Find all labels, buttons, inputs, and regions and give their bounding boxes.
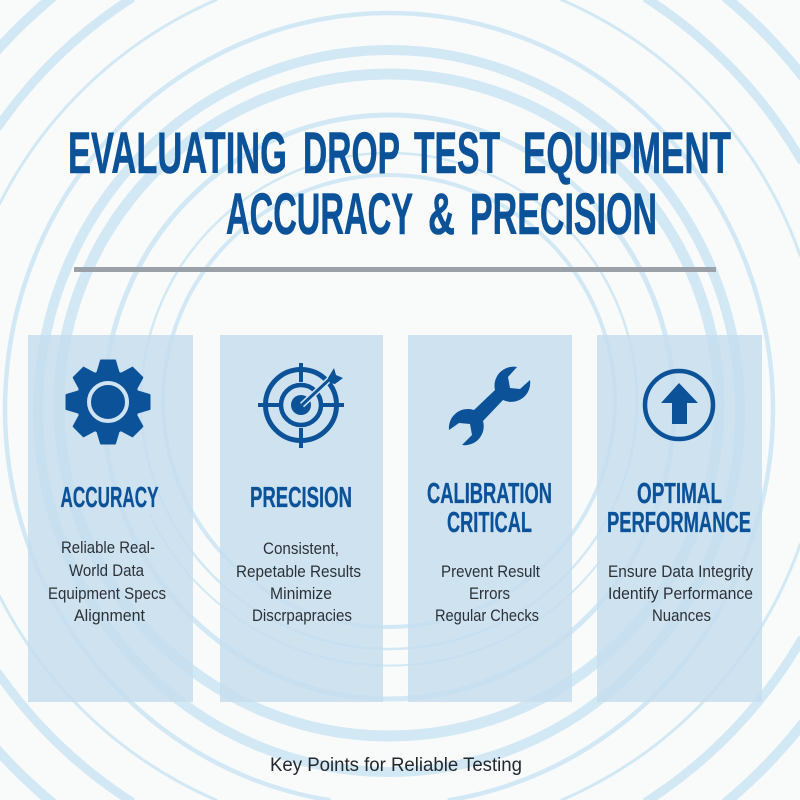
text: accuracy points: World Data (69, 561, 144, 580)
heading: optimal performance: OPTIMAL (637, 478, 722, 510)
title: ACCURACY (226, 182, 413, 247)
text: calibration points: Regular Checks (435, 606, 539, 625)
title: PRECISION (470, 182, 657, 247)
icon: up arrow in circle (645, 371, 713, 439)
text: precision points: Minimize (270, 584, 332, 603)
text: accuracy points (48, 538, 166, 625)
heading: calibration critical: CRITICAL (447, 507, 532, 539)
panel: optimal performance (597, 335, 762, 702)
text: precision points: Consistent, (263, 539, 339, 558)
footer caption: Key Points for Reliable Testing (270, 755, 522, 776)
heading: optimal performance (607, 478, 751, 539)
icon: target with arrow (258, 363, 344, 448)
heading: accuracy: ACCURACY (60, 482, 158, 514)
icon: wrench (449, 367, 530, 445)
text: performance points: Nuances (652, 606, 711, 625)
title: & (428, 182, 455, 247)
text: precision points: Repetable Results (236, 562, 361, 581)
text: accuracy points: Alignment (74, 606, 145, 625)
panel: calibration critical (408, 335, 572, 702)
title (68, 121, 731, 247)
title: TEST (414, 121, 500, 186)
icon: gear (66, 360, 150, 444)
title: DROP (303, 121, 400, 186)
panel: precision (220, 335, 383, 702)
heading: calibration critical: CALIBRATION (427, 478, 552, 510)
text: calibration points: Prevent Result (441, 562, 540, 581)
divider rule (74, 267, 716, 272)
heading: calibration critical (427, 478, 552, 539)
text: accuracy points: Reliable Real- (61, 538, 155, 557)
panel: accuracy (28, 335, 193, 702)
text: performance points: Ensure Data Integrity (608, 562, 753, 581)
text: performance points: Identify Performance (608, 584, 753, 603)
text: accuracy points: Equipment Specs (48, 584, 166, 603)
text: precision points (236, 539, 361, 625)
text: performance points (608, 562, 753, 625)
heading: precision: PRECISION (250, 482, 352, 514)
text: precision points: Discrpapracies (252, 606, 352, 625)
text: calibration points: Errors (469, 584, 510, 603)
text: calibration points (435, 562, 540, 625)
title: EVALUATING (68, 121, 287, 186)
